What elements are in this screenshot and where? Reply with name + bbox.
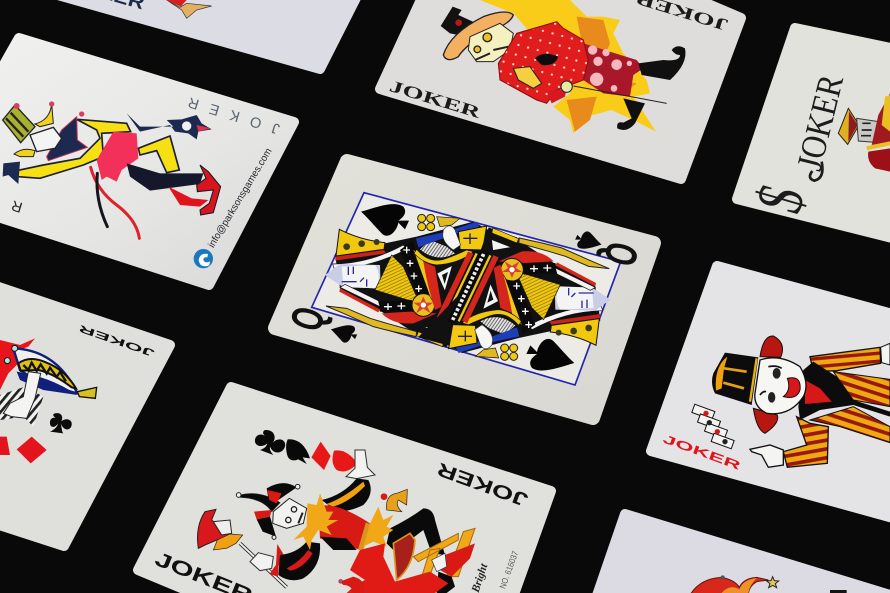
serial number: NO. 616037 bbox=[497, 549, 520, 590]
yellow splash bbox=[480, 0, 656, 133]
small puppet bbox=[127, 113, 212, 139]
goose head bbox=[386, 489, 407, 512]
queen lower half bbox=[418, 227, 610, 371]
crown and robe bbox=[838, 93, 890, 172]
yellow peplum bbox=[363, 507, 393, 547]
joker title and crown bbox=[743, 71, 890, 221]
sleeve down bbox=[783, 417, 828, 467]
partial heart bbox=[0, 437, 10, 455]
dark legs bbox=[387, 508, 445, 555]
red collar bbox=[805, 380, 832, 404]
red tunic bbox=[97, 132, 138, 182]
card face bbox=[0, 284, 170, 546]
card: bottom-centre red joker bbox=[138, 387, 551, 593]
jester artwork and text bbox=[151, 430, 531, 593]
suit: spade bbox=[286, 439, 310, 464]
dark leg bbox=[127, 163, 203, 191]
cane bbox=[573, 86, 667, 103]
yellow limbs bbox=[12, 119, 131, 178]
top hat bbox=[712, 353, 758, 405]
artwork frame bbox=[312, 193, 621, 385]
blue arc bbox=[13, 348, 77, 393]
jester cap bbox=[240, 494, 280, 512]
card: right clown joker bbox=[651, 266, 890, 520]
clown artwork bbox=[661, 336, 890, 473]
card: lower-left joker bbox=[0, 284, 170, 546]
puppet head bbox=[197, 509, 230, 548]
raised hand bbox=[346, 450, 375, 479]
mouth bbox=[783, 378, 800, 397]
queen upper half bbox=[325, 204, 517, 347]
card face bbox=[380, 0, 741, 179]
fanned cards bbox=[692, 404, 734, 449]
card: top-right serif joker bbox=[737, 28, 890, 240]
raised hand bbox=[881, 343, 890, 365]
coat body bbox=[833, 372, 890, 407]
card face bbox=[737, 28, 890, 240]
face bbox=[30, 127, 62, 152]
red torso bbox=[318, 505, 370, 550]
brim bbox=[443, 12, 513, 60]
joker text: JOKER bbox=[186, 93, 282, 136]
web address: info@parksonsgames.com bbox=[206, 146, 275, 250]
face bbox=[755, 358, 806, 414]
joker text inverted: JOKER bbox=[434, 458, 531, 511]
face bbox=[468, 23, 513, 62]
jester art and text bbox=[0, 322, 156, 463]
upper sleeve bbox=[810, 347, 881, 372]
top hat bbox=[441, 7, 477, 37]
card: upper-left joker bbox=[0, 38, 294, 285]
jester hat artwork bbox=[690, 575, 847, 593]
card: queen of spades bbox=[275, 161, 654, 418]
red brim bbox=[760, 336, 783, 357]
red shoe bbox=[440, 543, 475, 577]
joker text: JOKER bbox=[78, 322, 156, 358]
red shoes bbox=[168, 187, 208, 207]
index: lower-left Q: Q bbox=[280, 301, 335, 336]
puppet stick bbox=[240, 543, 287, 587]
brand text: Bright bbox=[469, 562, 490, 593]
card face bbox=[592, 514, 890, 593]
club bbox=[50, 413, 72, 433]
jester hat bbox=[3, 105, 35, 143]
red lower body bbox=[347, 543, 448, 593]
index: lower-left spade bbox=[331, 325, 357, 343]
index: upper-right spade bbox=[575, 231, 602, 249]
suit: diamond bbox=[311, 442, 331, 470]
joker text: JOKER bbox=[387, 76, 484, 122]
upper arm bbox=[322, 478, 371, 512]
striped sleeves bbox=[0, 387, 43, 427]
joker figure and text bbox=[387, 0, 730, 133]
card: top-centre red joker bbox=[380, 0, 741, 179]
card: bottom-right partial bbox=[592, 514, 890, 593]
J flourish bbox=[810, 162, 822, 181]
collar bbox=[293, 493, 338, 550]
card face bbox=[651, 266, 890, 520]
suit: club bbox=[255, 430, 285, 455]
diamond bbox=[17, 437, 47, 463]
polka-dot legs bbox=[583, 43, 643, 97]
card face bbox=[138, 387, 551, 593]
suit: heart bbox=[332, 450, 357, 471]
face bbox=[273, 498, 307, 528]
joker hand and text fragment bbox=[96, 0, 212, 18]
card face bbox=[40, 0, 360, 69]
star bbox=[767, 577, 779, 588]
card face bbox=[0, 38, 294, 285]
logo bbox=[194, 249, 213, 268]
jester hat bbox=[690, 577, 768, 593]
red cuff bbox=[272, 548, 283, 575]
joker figure and text bbox=[3, 93, 282, 268]
joker text inverted: JOKER bbox=[631, 0, 730, 35]
hand bbox=[3, 372, 41, 418]
ribbons bbox=[91, 167, 139, 238]
corner letters: R bbox=[10, 196, 25, 215]
tassel bbox=[77, 387, 97, 398]
red coat bbox=[498, 22, 588, 103]
court artwork bbox=[280, 193, 649, 385]
pointing hand bbox=[750, 445, 783, 467]
patterned band bbox=[18, 359, 76, 388]
boots bbox=[638, 46, 686, 80]
gold chair bbox=[413, 528, 475, 593]
dollar sign index: $ bbox=[743, 178, 819, 221]
joker text: JOKER bbox=[661, 432, 743, 473]
lower hand bbox=[250, 553, 273, 571]
dark letter fragment bbox=[830, 590, 847, 593]
lower arm bbox=[278, 542, 320, 580]
card face bbox=[275, 161, 654, 418]
joker word: JOKER bbox=[789, 71, 851, 174]
red hat bbox=[0, 338, 35, 390]
drum bbox=[393, 533, 415, 580]
black lapel bbox=[798, 362, 890, 420]
card: top-left partial bbox=[40, 0, 360, 69]
index: upper-right Q: Q bbox=[594, 237, 649, 271]
belt bbox=[361, 523, 368, 550]
